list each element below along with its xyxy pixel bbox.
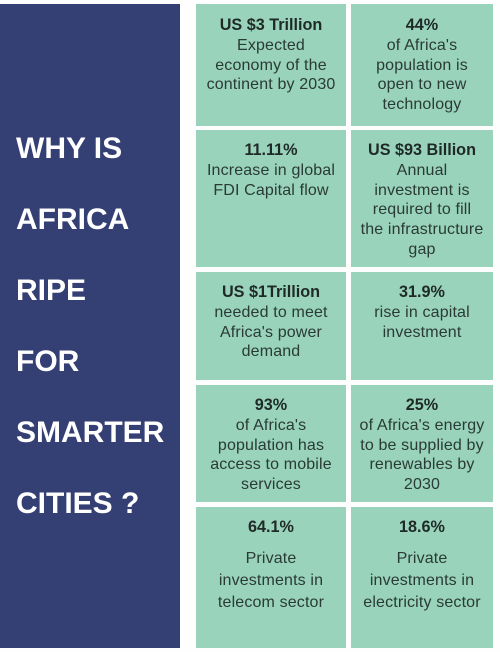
stat: 18.6%: Private bbox=[397, 550, 447, 567]
stat: 18.6%: investments in bbox=[370, 572, 474, 589]
stat: 64.1%: 64.1% bbox=[248, 518, 294, 536]
stat: US $93 Billion: required to fill bbox=[373, 201, 471, 218]
stat: US $3 Trillion: US $3 Trillion bbox=[220, 16, 322, 34]
title: why is africa ripe for smarter cities: AFRICA bbox=[16, 203, 129, 236]
stat: 93%: population has bbox=[218, 437, 324, 454]
stat: 25%: to be supplied by bbox=[360, 437, 484, 454]
title: why is africa ripe for smarter cities: RIPE bbox=[16, 274, 86, 307]
panel: title sidebar bbox=[0, 4, 180, 648]
stat: 18.6% bbox=[351, 507, 493, 648]
stat: US $1Trillion: US $1Trillion bbox=[222, 283, 320, 301]
stat: 25%: 25% bbox=[406, 396, 438, 414]
stat: 31.9%: 31.9% bbox=[399, 283, 445, 301]
stat: US $93 Billion: US $93 Billion bbox=[368, 141, 476, 159]
stat: US $93 Billion: investment is bbox=[374, 182, 470, 199]
stat: 11.11%: Increase in global bbox=[207, 162, 335, 179]
stat: 93%: access to mobile bbox=[210, 456, 332, 473]
stat: US $93 Billion: Annual bbox=[397, 162, 447, 179]
stat: US $3 Trillion: continent by 2030 bbox=[207, 76, 335, 93]
title: why is africa ripe for smarter cities: FOR bbox=[16, 345, 79, 378]
stat: US $3 Trillion: economy of the bbox=[215, 57, 327, 74]
stat: 64.1%: Private bbox=[246, 550, 296, 567]
stat: 44%: technology bbox=[383, 96, 461, 113]
stat: 44% bbox=[351, 4, 493, 126]
stat: US $1Trillion: Africa's power bbox=[220, 324, 322, 341]
title: why is africa ripe for smarter cities bbox=[16, 132, 164, 520]
stat: 25%: of Africa's energy bbox=[360, 417, 484, 434]
stat: US $1Trillion bbox=[196, 272, 346, 380]
stat: 18.6%: 18.6% bbox=[399, 518, 445, 536]
stat: US $93 Billion bbox=[351, 130, 493, 267]
stat: 64.1% bbox=[196, 507, 346, 648]
stat: US $3 Trillion: Expected bbox=[237, 37, 305, 54]
title: why is africa ripe for smarter cities: WHY IS bbox=[16, 132, 122, 165]
stat: US $93 Billion: the infrastructure bbox=[361, 221, 483, 238]
stat: 11.11%: 11.11% bbox=[244, 141, 298, 159]
stat: 11.11% bbox=[196, 130, 346, 267]
stat: 64.1%: telecom sector bbox=[218, 594, 324, 611]
stat: 44%: population is bbox=[376, 57, 468, 74]
stat: 25%: 2030 bbox=[404, 476, 440, 493]
stat: 44%: of Africa's bbox=[387, 37, 457, 54]
title: why is africa ripe for smarter cities: CITIES ? bbox=[16, 487, 139, 520]
stat: 93% bbox=[196, 385, 346, 502]
stat: US $93 Billion: gap bbox=[408, 241, 436, 258]
stat: 31.9%: rise in capital bbox=[374, 304, 470, 321]
stat: 11.11%: FDI Capital flow bbox=[213, 182, 329, 199]
stat: 93%: of Africa's bbox=[236, 417, 306, 434]
stat: US $1Trillion: demand bbox=[242, 343, 300, 360]
stat: 64.1%: investments in bbox=[219, 572, 323, 589]
stat: 25% bbox=[351, 385, 493, 502]
stat: 44%: open to new bbox=[378, 76, 466, 93]
stat: 93%: 93% bbox=[255, 396, 287, 414]
stat: 18.6%: electricity sector bbox=[363, 594, 481, 611]
stat: 31.9%: investment bbox=[383, 324, 461, 341]
title: why is africa ripe for smarter cities: SMARTER bbox=[16, 416, 164, 449]
stat: 25%: renewables by bbox=[369, 456, 475, 473]
stat: 31.9% bbox=[351, 272, 493, 380]
stat: US $1Trillion: needed to meet bbox=[214, 304, 328, 321]
stat: US $3 Trillion bbox=[196, 4, 346, 126]
stat: 93%: services bbox=[241, 476, 301, 493]
stat: 44%: 44% bbox=[406, 16, 438, 34]
